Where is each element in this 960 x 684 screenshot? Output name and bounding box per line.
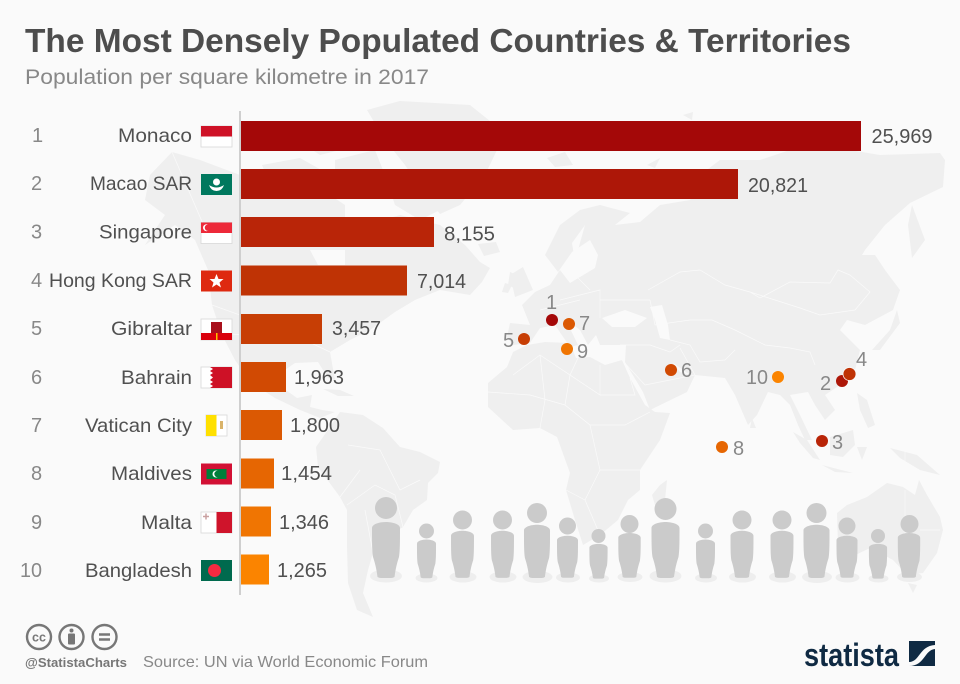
person 5 [522,503,552,583]
person 3 [450,510,476,582]
marker 1: 1 [546,292,557,314]
row 10: Bangladesh [20,554,327,584]
person 10 [695,524,717,582]
marker 5 [503,330,530,352]
bar chart [20,111,932,595]
person 11 [729,510,756,582]
row 7: Vatican City: Vatican City [85,415,192,437]
marker 8 [716,438,744,460]
row 3: Singapore [31,217,495,247]
person 7 [589,529,609,582]
marker 9: 9 [577,341,588,363]
map markers [503,292,867,460]
marker 10: 10 [746,367,768,389]
row 9: Malta: 9 [31,512,42,534]
marker 7 [563,313,590,335]
row 4: Hong Kong SAR [31,266,466,296]
flag: Hong Kong [201,270,232,292]
row 2: Macao SAR: 2 [31,173,42,195]
row 6: Bahrain [31,362,344,392]
row 1: Monaco: Monaco [118,125,192,147]
marker 2 [820,373,848,395]
person 15 [868,529,888,582]
row 10: Bangladesh: 1,265 [277,560,327,582]
row 4: Hong Kong SAR: Hong Kong SAR [49,270,192,292]
person 9 [650,498,682,582]
row 1: Monaco: 1 [32,125,43,147]
row 6: Bahrain: 1,963 [294,367,344,389]
row 5: Gibraltar [31,314,381,344]
flag: Malta [201,512,232,533]
row 9: Malta: 1,346 [279,512,329,534]
person 12 [769,510,796,582]
row 4: Hong Kong SAR: 4 [31,270,42,292]
flag: Bahrain [201,367,232,388]
marker 8: 8 [733,438,744,460]
row 7: Vatican City: 1,800 [290,415,340,437]
background world map [145,101,945,617]
person 1 [370,497,402,582]
inland seas [310,225,690,375]
icon: no derivatives [92,625,116,649]
row 3: Singapore: Singapore [99,222,192,244]
row 1: Monaco: 25,969 [872,126,932,148]
person 4 [490,510,516,582]
row 9: Malta: Malta [141,512,192,534]
person 2 [416,524,438,582]
icon: attribution [60,625,84,649]
logo mark [909,641,935,666]
row 2: Macao SAR: 20,821 [748,175,808,197]
flag: Maldives [201,464,232,484]
creative commons icons [27,625,116,649]
row 6: Bahrain: 6 [31,367,42,389]
flag: Bangladesh [201,560,232,581]
flag: Macao [201,174,232,195]
row 8: Maldives [31,458,332,488]
statista logo: statista [804,637,899,673]
marker 4 [843,349,867,380]
person 16 [897,515,922,582]
axis line [239,111,241,595]
person 13 [802,503,832,583]
row 10: Bangladesh: 10 [20,560,42,582]
row 2: Macao SAR: Macao SAR [90,173,192,195]
people illustration [370,497,922,583]
marker 1 [546,292,558,326]
flag: Singapore [201,222,232,244]
country borders [172,152,940,553]
marker 3 [816,432,843,454]
icon: cc: cc [32,630,46,644]
row 8: Maldives: Maldives [111,463,192,485]
flag: Vatican City [206,415,227,436]
person 6 [556,518,580,582]
twitter handle: @StatistaCharts [25,656,127,670]
row 7: Vatican City: 7 [31,415,42,437]
marker 9 [561,341,588,363]
marker 3: 3 [832,432,843,454]
row 2: Macao SAR [31,169,808,199]
row 8: Maldives: 1,454 [281,463,332,485]
person 14 [836,518,860,582]
row 3: Singapore: 8,155 [444,224,495,246]
marker 6: 6 [681,360,692,382]
subtitle: Population per square kilometre in 2017 [25,66,429,89]
marker 5: 5 [503,330,514,352]
flag: Gibraltar [201,319,232,340]
title: The Most Densely Populated Countries & Territories [25,22,851,59]
marker 6 [665,360,692,382]
row 9: Malta [31,506,329,536]
marker 4: 4 [856,349,867,371]
marker 2: 2 [820,373,831,395]
row 5: Gibraltar: 3,457 [332,318,381,340]
row 5: Gibraltar: Gibraltar [111,318,193,340]
marker 7: 7 [579,313,590,335]
row 4: Hong Kong SAR: 7,014 [417,271,466,293]
person 8 [618,515,642,582]
source: Source: UN via World Economic Forum [143,654,428,671]
row 1: Monaco [32,121,932,151]
marker 10 [746,367,784,389]
row 10: Bangladesh: Bangladesh [85,560,192,582]
row 5: Gibraltar: 5 [31,318,42,340]
row 8: Maldives: 8 [31,463,42,485]
row 7: Vatican City [31,410,340,440]
row 6: Bahrain: Bahrain [121,367,192,389]
row 3: Singapore: 3 [31,222,42,244]
flag: Monaco [201,126,232,147]
